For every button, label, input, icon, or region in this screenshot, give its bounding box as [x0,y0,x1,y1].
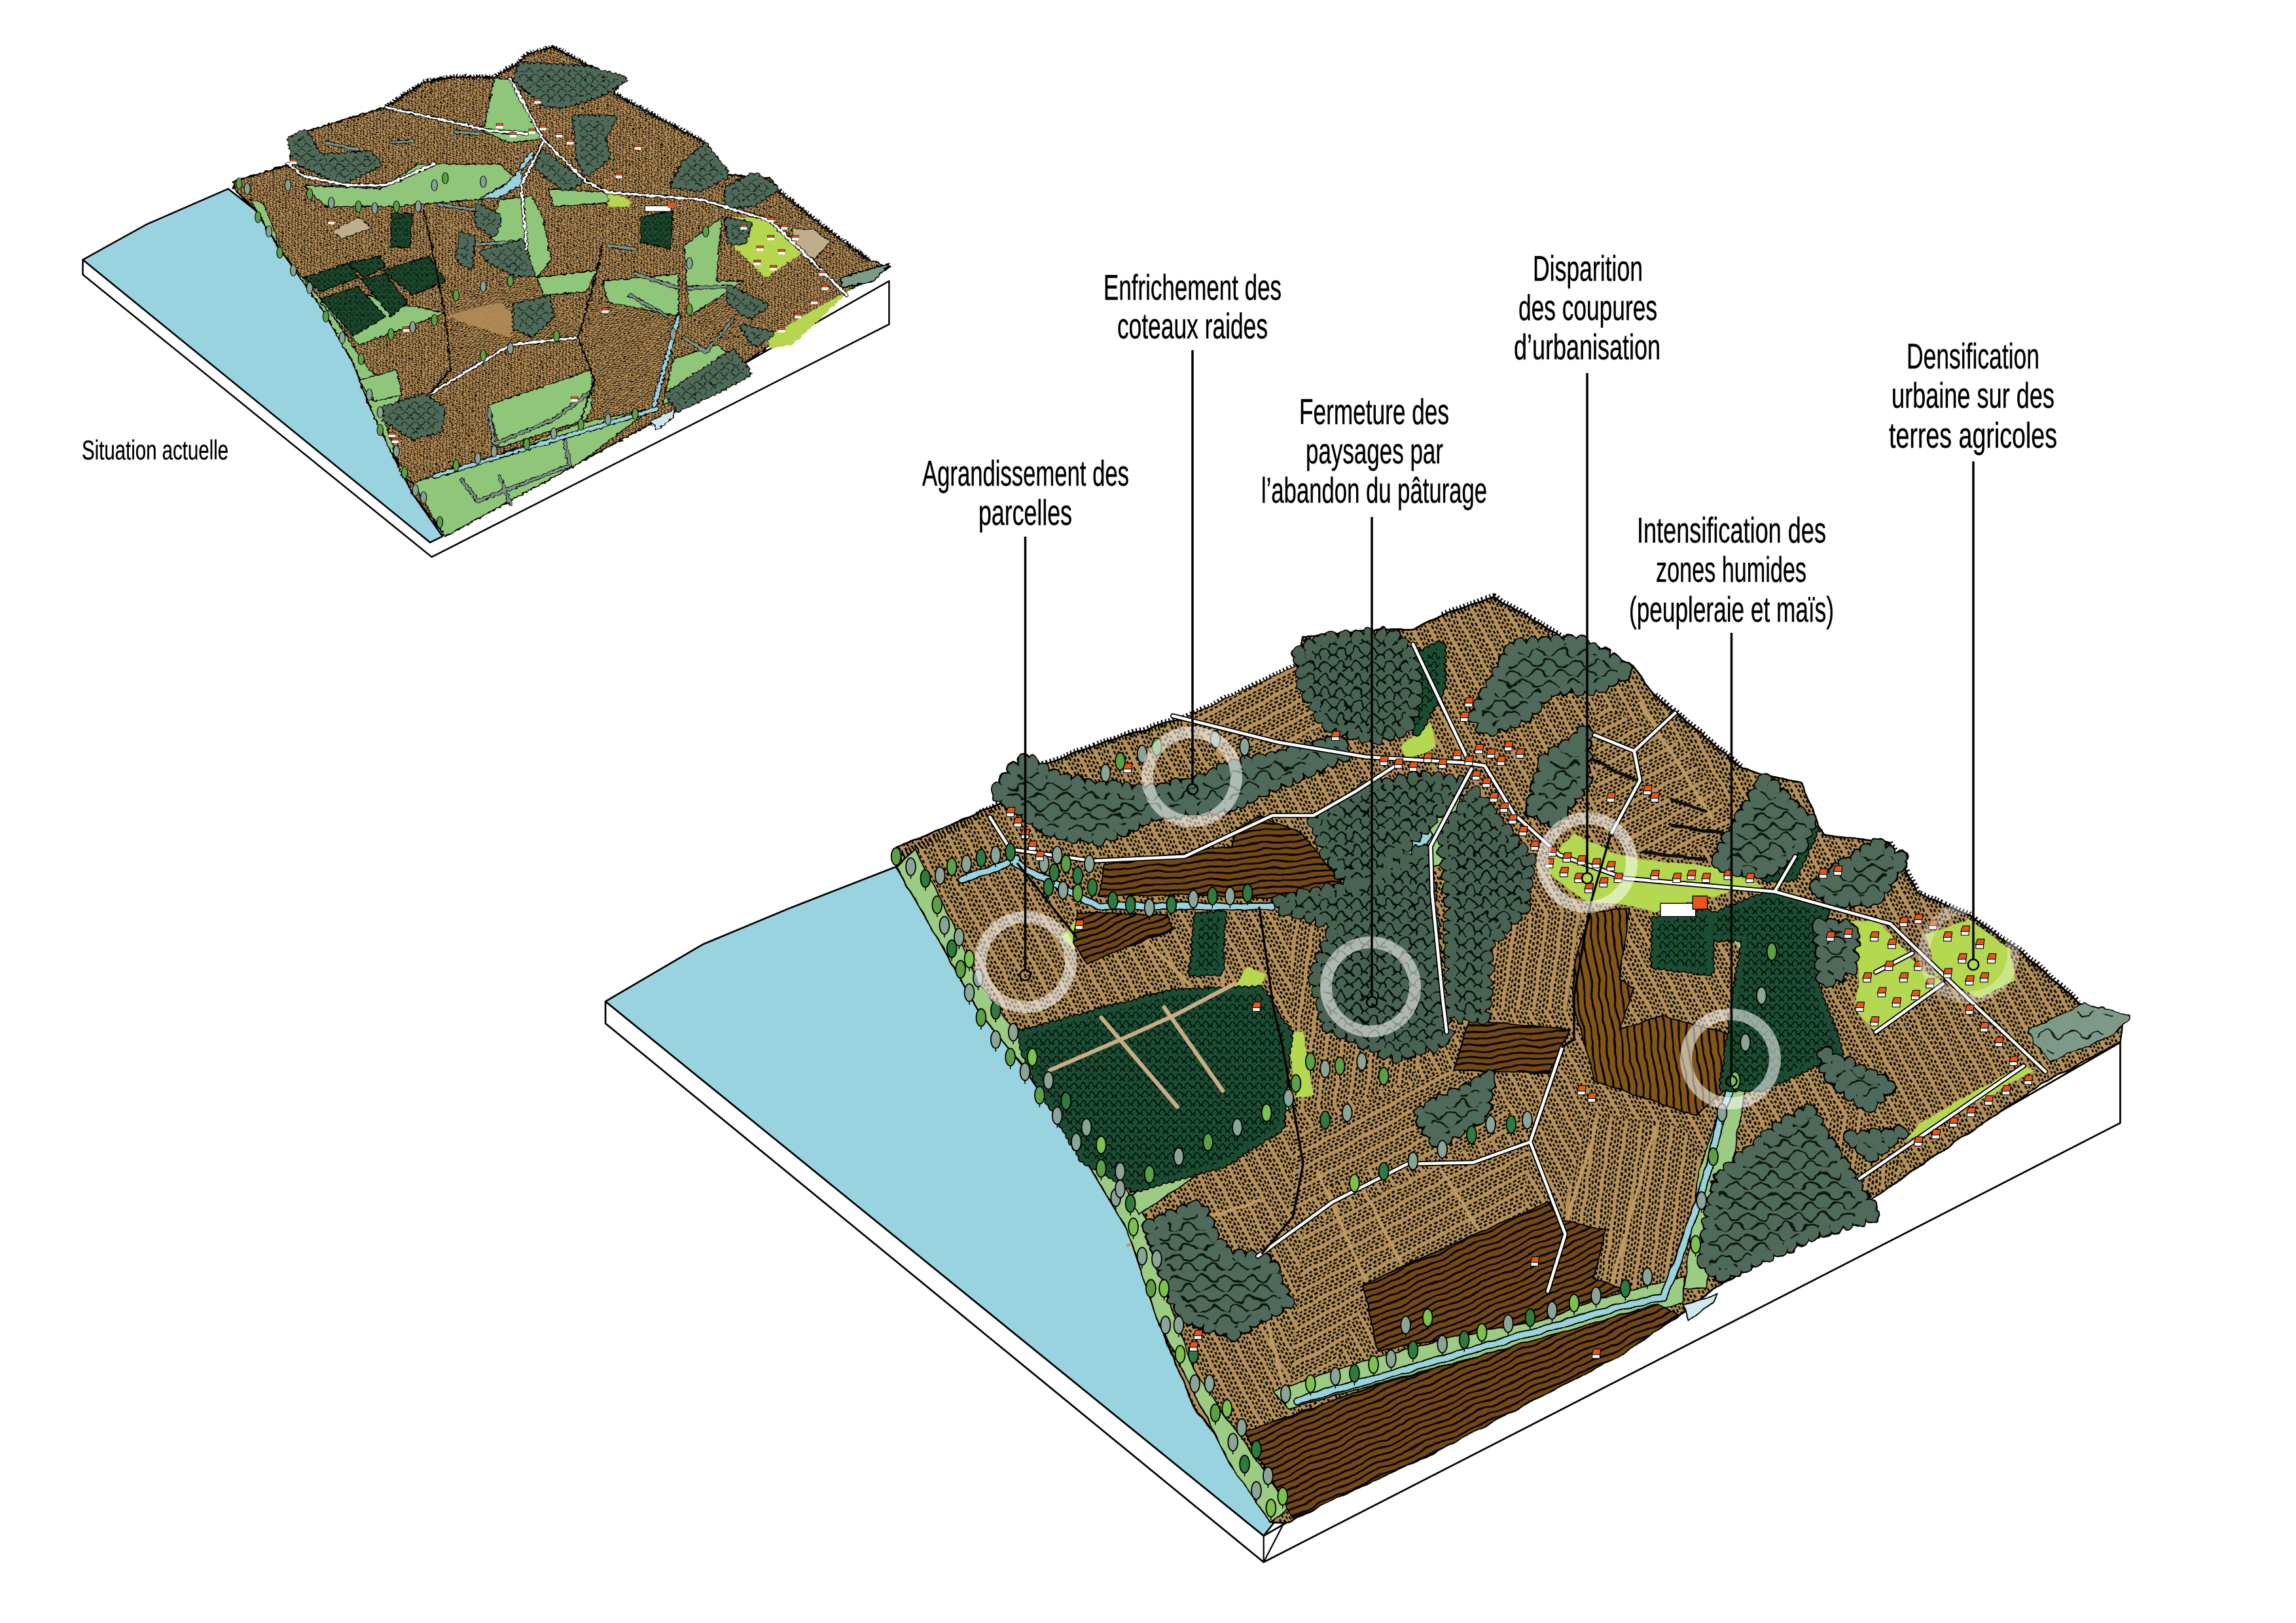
callout: agrandissement des parcelles [922,453,1129,980]
main roads: white carriageway [990,644,2045,1291]
inset trees [236,173,709,528]
main slab corner [1264,1520,1285,1562]
callout: intensification des zones humides [1629,510,1834,1086]
plantation tracks [1050,984,1234,1107]
callout: enfrichement des coteaux raides: coteaux raides [1117,306,1268,346]
label: situation actuelle: Situation actuelle [82,435,228,465]
dark farm tracks [1018,834,1611,1253]
callout: densification urbaine: urbaine sur des [1892,375,2054,416]
callout: intensification des zones humides: zones humides [1656,549,1806,590]
inset meadows [250,79,749,537]
main land base and vineyards [893,597,2123,1523]
trees [891,730,1776,1520]
inset slab walls [83,260,889,557]
inset roads [288,79,847,395]
inset houses [290,99,829,443]
callout: densification urbaine [1889,336,2057,970]
callout: disparition des coupures d'urbanisation [1514,248,1660,883]
callout: fermeture des paysages: paysages par [1306,431,1443,471]
grass margins [896,776,1749,1523]
ploughed fields [1073,815,1735,1518]
inset woods [291,65,776,437]
vineyard parcel paths [1128,703,1713,1406]
inset hedges [326,132,733,505]
callout: agrandissement des parcelles: Agrandissement des [922,453,1129,493]
callout: enfrichement des coteaux raides [1103,267,1282,794]
white buildings [1660,896,1708,916]
callout: fermeture des paysages: l’abandon du pâturage [1261,470,1487,510]
streams and lake [962,798,1791,1401]
inset suburban lime areas [608,192,852,348]
inset pine plantations [304,210,673,336]
main slab walls [605,1001,2120,1562]
callout: disparition des coupures d'urbanisation: des coupures [1518,287,1657,328]
callout: disparition des coupures d'urbanisation: d’urbanisation [1514,327,1660,367]
callout: disparition des coupures d'urbanisation: Disparition [1533,248,1643,289]
pine plantations [1020,644,1840,1189]
callout: fermeture des paysages [1261,391,1487,1007]
callout: intensification des zones humides: (peupleraie et maïs) [1629,589,1834,630]
main water [605,866,1274,1536]
callout: fermeture des paysages: Fermeture des [1299,391,1449,432]
callout: intensification des zones humides: Intensification des [1637,510,1826,550]
inset block diagram: situation actuelle [83,47,890,557]
main roads [990,644,2045,1291]
houses [1006,698,2033,1359]
inset water [83,188,442,543]
rings highlighting the affected areas [980,732,2013,1103]
callout: agrandissement des parcelles: parcelles [978,492,1072,533]
inset land [234,47,890,537]
callout: densification urbaine: terres agricoles [1889,415,2057,455]
inset water courses [478,168,521,200]
callout: densification urbaine: Densification [1907,336,2039,376]
woodland masses [999,634,2126,1334]
vineyard hedge strips [1590,758,1725,859]
main block diagram: future evolution [605,597,2126,1562]
lime patches [1062,722,2036,1142]
callout: enfrichement des coteaux raides: Enfrichement des [1103,267,1282,308]
